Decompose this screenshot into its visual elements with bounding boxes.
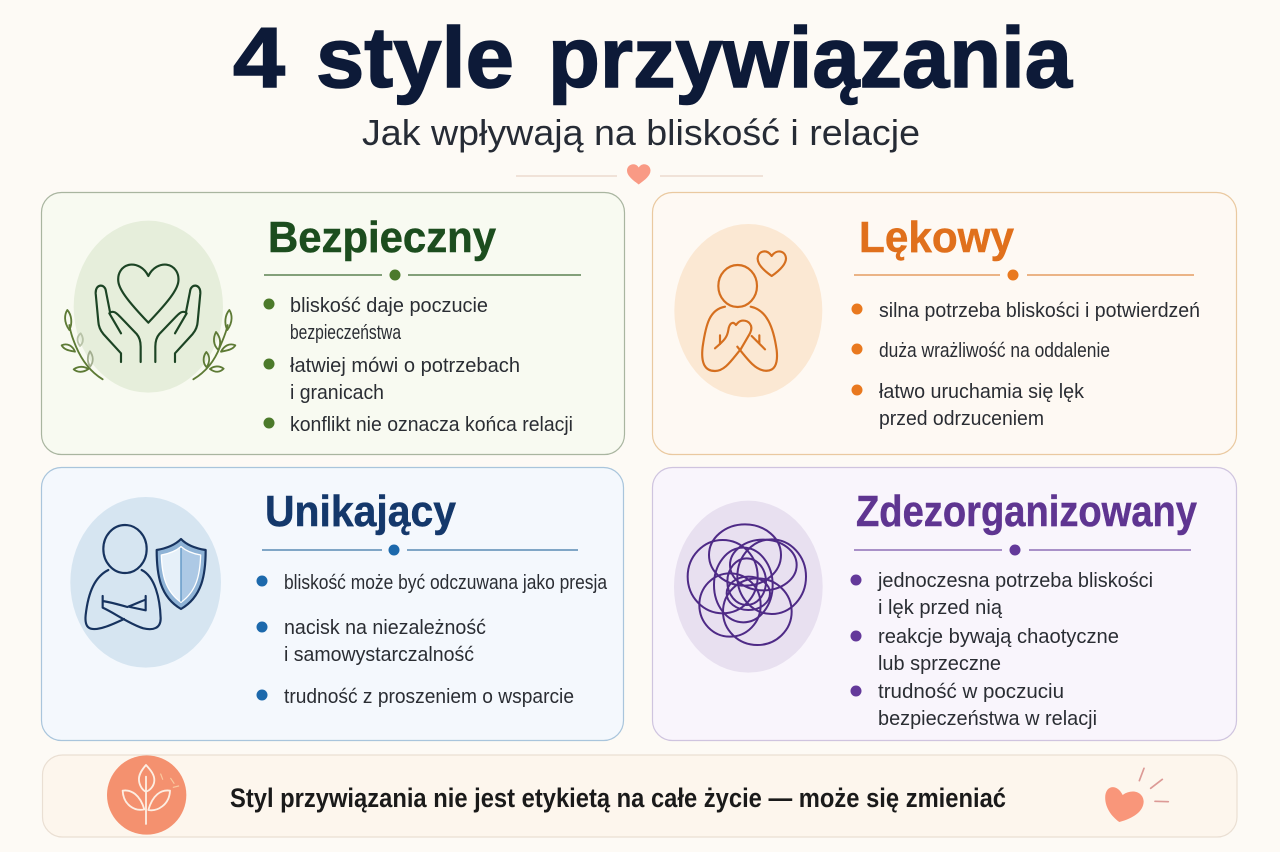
title: przywiązania bbox=[548, 11, 1073, 106]
icon: left olive branch bbox=[62, 310, 103, 379]
heading divider bbox=[264, 270, 581, 280]
bullet list: reakcje bywają chaotyczne bbox=[878, 625, 1119, 648]
bullet list: nacisk na niezależność bbox=[284, 616, 486, 639]
bullet list: bliskość daje poczucie bbox=[290, 294, 488, 317]
bullet list: jednoczesna potrzeba bliskości bbox=[877, 569, 1153, 592]
bullet list: bezpieczeństwa bbox=[290, 321, 401, 344]
bullet list bbox=[264, 294, 573, 436]
bullet list: i samowystarczalność bbox=[284, 643, 474, 666]
bullet list: i granicach bbox=[290, 381, 384, 404]
panel: Lękowy bbox=[652, 192, 1236, 454]
icon: right olive branch bbox=[193, 310, 235, 379]
heading: Unikający bbox=[265, 487, 456, 536]
footer banner bbox=[42, 755, 1237, 837]
title bbox=[233, 11, 1073, 106]
subtitle: Jak wpływają na bliskość i relacje bbox=[362, 112, 920, 153]
icon: hands holding heart bbox=[62, 221, 235, 393]
bullet list: i lęk przed nią bbox=[878, 596, 1003, 619]
bullet list: konflikt nie oznacza końca relacji bbox=[290, 413, 573, 436]
bullet list: bezpieczeństwa w relacji bbox=[878, 707, 1097, 730]
bullet list: łatwiej mówi o potrzebach bbox=[290, 354, 520, 377]
bullet list: przed odrzuceniem bbox=[879, 407, 1044, 430]
bullet list bbox=[256, 571, 608, 708]
panel: Bezpieczny bbox=[42, 192, 624, 454]
shield inner face bbox=[161, 547, 201, 602]
bullet list bbox=[850, 569, 1153, 730]
bullet list bbox=[852, 299, 1200, 430]
heading: Zdezorganizowany bbox=[856, 487, 1197, 536]
title: 4 bbox=[233, 11, 285, 106]
title: style bbox=[316, 11, 514, 106]
panel: Unikający bbox=[42, 468, 624, 740]
icon: heart with rays bbox=[1105, 768, 1168, 822]
bullet list: trudność z proszeniem o wsparcie bbox=[284, 685, 574, 708]
panel: Zdezorganizowany bbox=[652, 468, 1236, 740]
bullet list: silna potrzeba bliskości i potwierdzeń bbox=[879, 299, 1200, 322]
bullet list: trudność w poczuciu bbox=[878, 680, 1064, 703]
heading: Lękowy bbox=[859, 213, 1015, 262]
heading divider bbox=[854, 270, 1194, 280]
takeaway text: Styl przywiązania nie jest etykietą na całe życie — może się zmieniać bbox=[230, 783, 1006, 813]
icon: tangled circles bbox=[674, 501, 823, 673]
heart divider bbox=[516, 164, 763, 184]
bullet list: łatwo uruchamia się lęk bbox=[879, 380, 1085, 403]
bullet list: lub sprzeczne bbox=[878, 652, 1001, 675]
heading divider bbox=[854, 544, 1191, 556]
icon: person with shield bbox=[70, 497, 221, 668]
heading: Bezpieczny bbox=[268, 213, 496, 262]
bullet list: duża wrażliwość na oddalenie bbox=[879, 339, 1110, 362]
bullet list: bliskość może być odczuwana jako presja bbox=[284, 571, 608, 594]
icon: sprout in circle bbox=[107, 755, 186, 835]
icon: person hugging heart bbox=[674, 224, 822, 397]
heading divider bbox=[262, 544, 578, 556]
